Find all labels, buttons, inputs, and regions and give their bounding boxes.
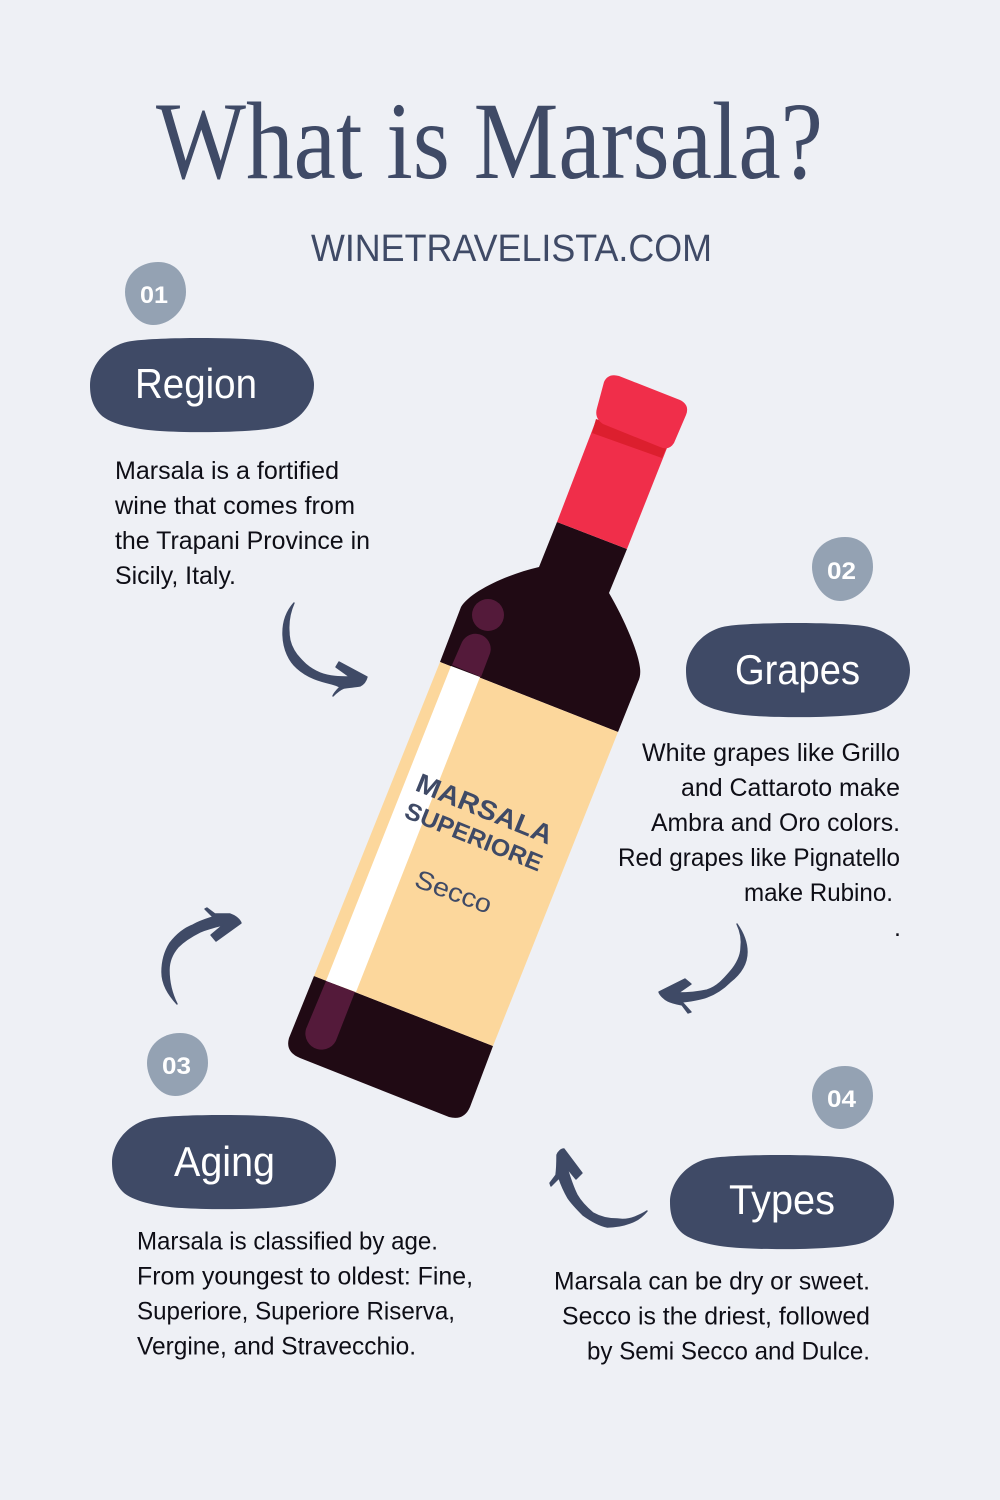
text: grapes description: Red grapes like Pignatello (618, 844, 900, 872)
number badge 04 (812, 1066, 873, 1129)
text: types description: Marsala can be dry or sweet. (554, 1268, 870, 1296)
heading: types: Types (729, 1176, 835, 1223)
panel: region (90, 262, 370, 590)
text: region description: Marsala is a fortified (115, 457, 339, 485)
label text: Marsala: MARSALA (412, 768, 557, 850)
number badge 04: 04 (827, 1086, 857, 1113)
label (314, 662, 618, 1046)
heading: aging: Aging (174, 1138, 275, 1185)
illustration: wine bottle (288, 375, 687, 1118)
number badge 02 (812, 537, 873, 601)
label stripe (326, 666, 480, 992)
number badge 03: 03 (162, 1053, 191, 1080)
heading: region (90, 338, 314, 432)
subtitle: WINETRAVELISTA.COM (311, 228, 712, 270)
bottle base (288, 976, 493, 1118)
panel: aging (112, 1033, 473, 1360)
text: grapes description: White grapes like Grillo (642, 739, 900, 767)
heading: grapes: Grapes (735, 646, 860, 693)
arrow: aging to region (162, 908, 241, 1004)
number badge 01 (125, 262, 186, 325)
foil cap (596, 375, 687, 448)
heading: region: Region (135, 360, 257, 407)
arrow: types to aging (550, 1149, 647, 1227)
heading: grapes (686, 623, 910, 717)
text: types description (554, 1268, 870, 1366)
highlight: bottom (305, 981, 355, 1050)
text: grapes description: Ambra and Oro colors. (651, 809, 900, 837)
text: types description: by Semi Secco and Dulce. (587, 1338, 870, 1366)
text: aging description: Marsala is classified by age. (137, 1228, 438, 1256)
number badge 01: 01 (140, 282, 168, 309)
text: grapes description: and Cattaroto make (681, 774, 900, 802)
panel: types (554, 1066, 894, 1366)
highlight: shoulder dot (472, 599, 504, 631)
panel: grapes (618, 537, 910, 942)
foil band (592, 419, 668, 458)
heading: types (670, 1155, 894, 1249)
text: region description: wine that comes from (114, 492, 355, 520)
number badge 02: 02 (827, 558, 856, 585)
arrow: grapes to types (659, 924, 747, 1013)
title: What is Marsala? (156, 80, 823, 202)
text: grapes description: . (894, 914, 901, 942)
text: aging description: Superiore, Superiore Riserva, (137, 1298, 455, 1326)
label text: Superiore: SUPERIORE (401, 798, 546, 877)
foil neck (557, 423, 667, 549)
heading: aging (112, 1115, 336, 1209)
label text: Secco: Secco (411, 864, 496, 920)
text: grapes description (618, 739, 901, 942)
highlight: top (452, 634, 491, 677)
arrow: region to bottle (283, 603, 367, 696)
number badge 03 (147, 1033, 208, 1096)
text: region description: Sicily, Italy. (115, 562, 236, 590)
text: region description (114, 457, 370, 590)
text: grapes description: make Rubino. (744, 879, 893, 907)
text: aging description: From youngest to oldest: Fine, (137, 1262, 473, 1290)
text: region description: the Trapani Province in (115, 527, 370, 555)
bottle glass (440, 522, 640, 732)
text: aging description (137, 1228, 473, 1360)
text: types description: Secco is the driest, followed (562, 1302, 870, 1330)
text: aging description: Vergine, and Stravecchio. (137, 1332, 416, 1360)
